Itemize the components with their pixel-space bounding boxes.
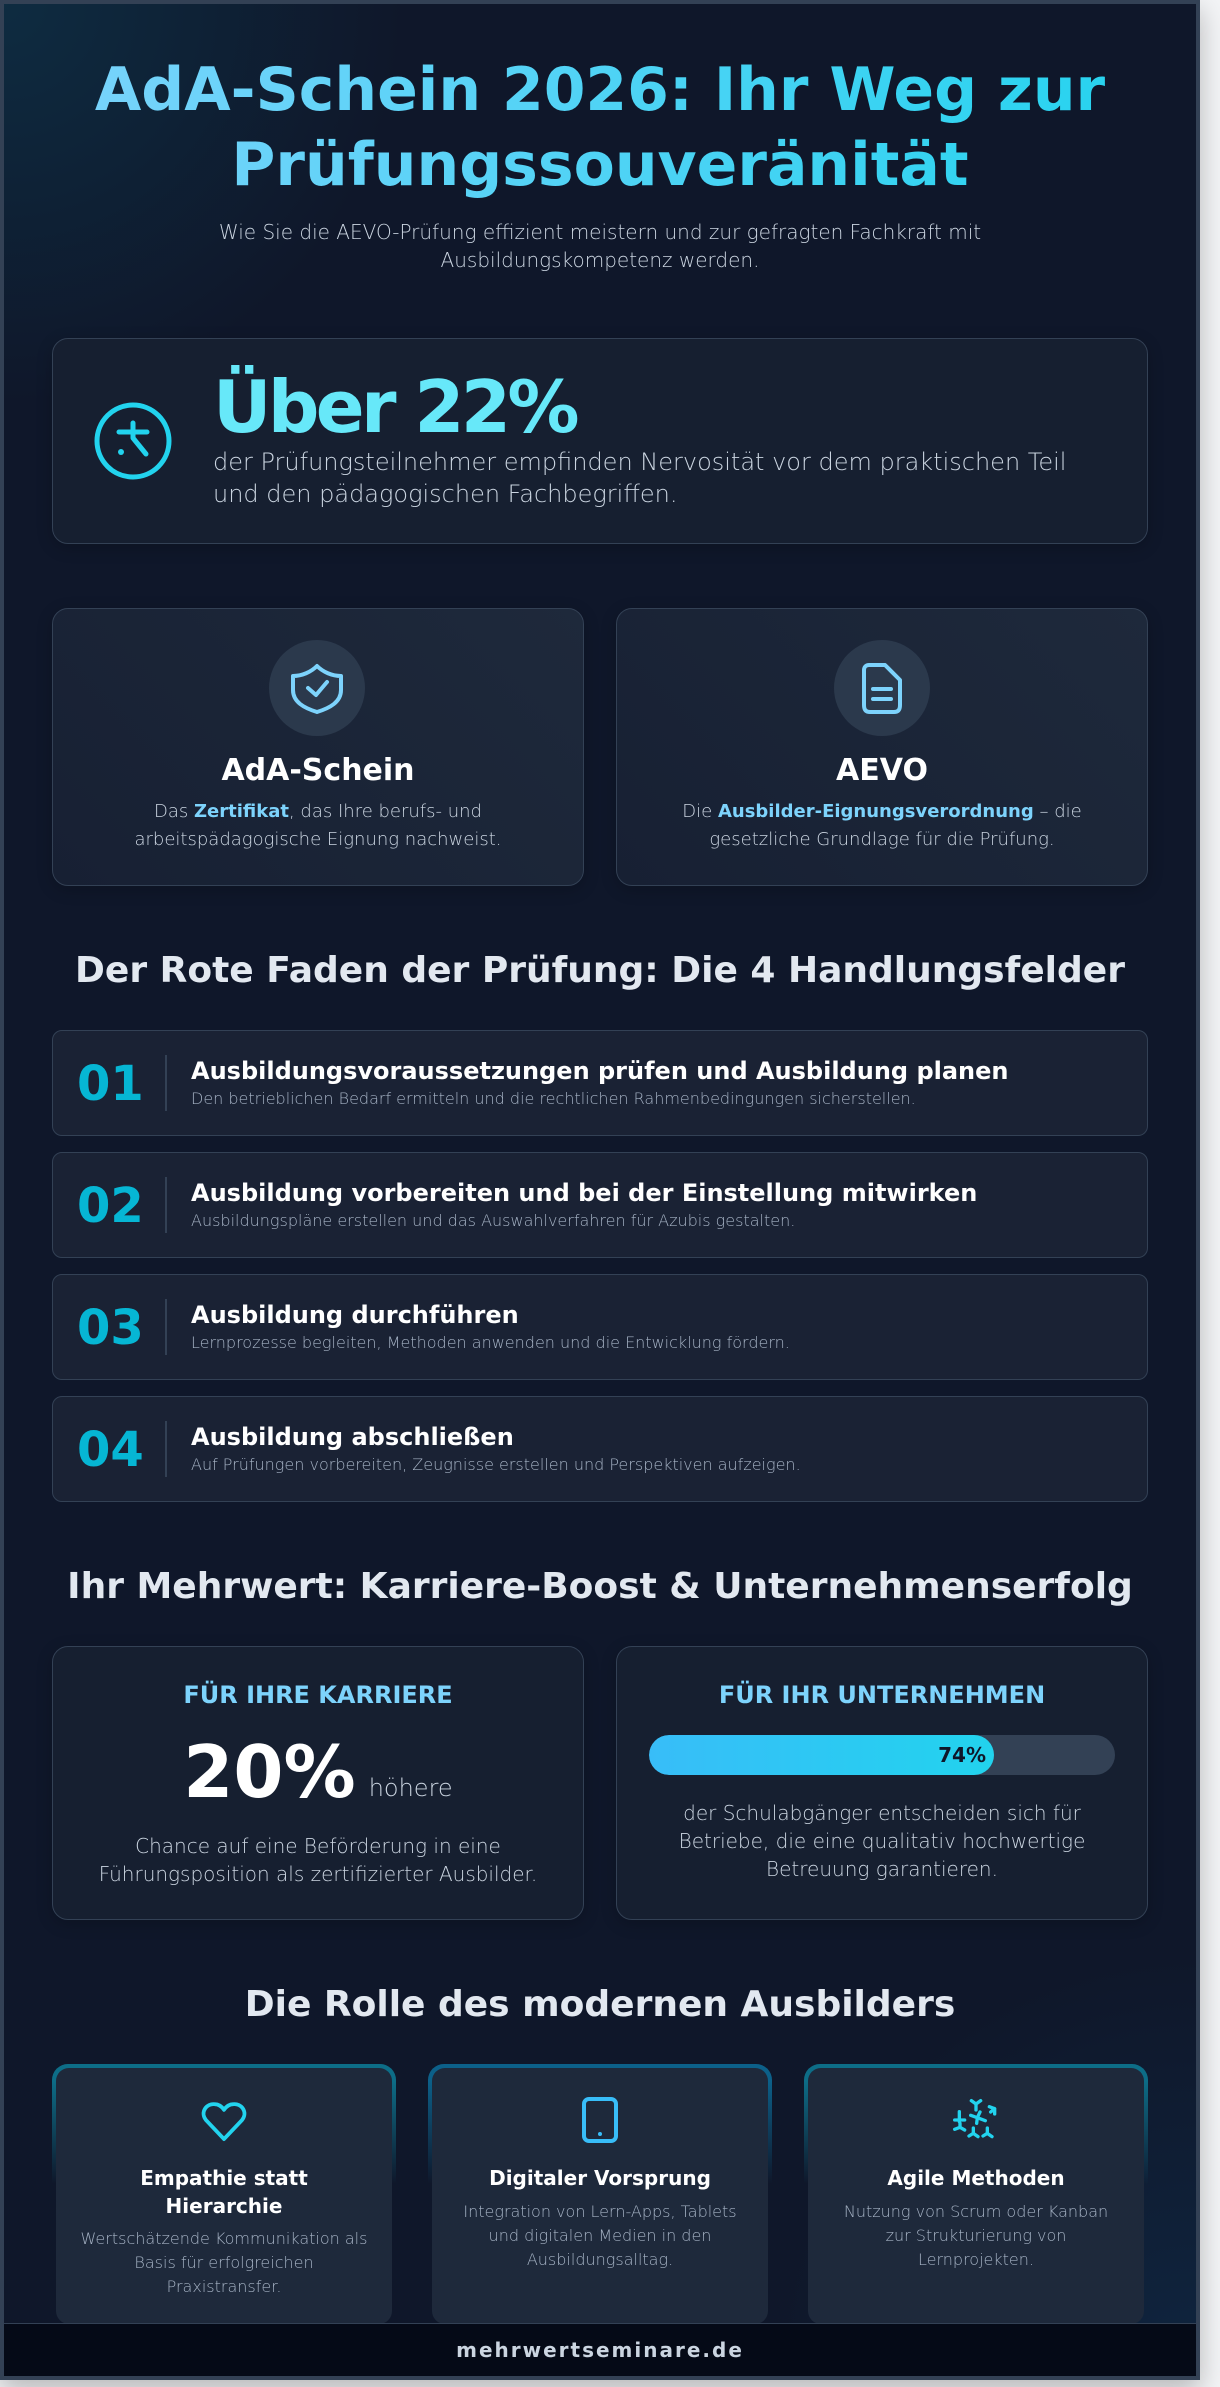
label: FÜR IHRE KARRIERE [183, 1681, 453, 1709]
heading: Rolle: Die Rolle des modernen Ausbilders [245, 1984, 955, 2025]
icon: document [834, 640, 930, 736]
role text: zur Strukturierung von [886, 2226, 1066, 2245]
icon: agile network [952, 2098, 996, 2138]
row 02: 02 [77, 1178, 144, 1234]
stat description: der Prüfungsteilnehmer empfinden Nervosität vor dem praktischen Teil [213, 448, 1066, 476]
title [4, 53, 1196, 203]
row 01: Den betrieblichen Bedarf ermitteln und die rechtlichen Rahmenbedingungen sicherstellen. [191, 1089, 916, 1108]
row 04 [52, 1396, 1148, 1502]
title: AdA-Schein 2026: Ihr Weg zur [95, 55, 1105, 125]
text: der Schulabgänger entscheiden sich für [683, 1801, 1081, 1825]
panel: Unternehmen [616, 1646, 1148, 1920]
row 04: Auf Prüfungen vorbereiten, Zeugnisse erstellen und Perspektiven aufzeigen. [191, 1455, 801, 1474]
row 04: 04 [77, 1422, 144, 1478]
row 03: Lernprozesse begleiten, Methoden anwenden und die Entwicklung fördern. [191, 1333, 790, 1352]
heading: Handlungsfelder: Der Rote Faden der Prüfung: Die 4 Handlungsfelder [75, 950, 1125, 991]
text: Führungsposition als zertifizierter Ausbilder. [99, 1862, 537, 1886]
icon: tablet [582, 2097, 618, 2143]
row 01 [52, 1030, 1148, 1136]
card text: arbeitspädagogische Eignung nachweist. [134, 829, 502, 850]
label: FÜR IHR UNTERNEHMEN [719, 1681, 1045, 1709]
card text [682, 801, 1082, 850]
text: Betreuung garantieren. [766, 1857, 998, 1881]
panel: statistic 22% [52, 338, 1148, 544]
subtitle [219, 220, 981, 272]
panel: Agile [804, 2064, 1148, 2324]
role text: Integration von Lern-Apps, Tablets [463, 2202, 737, 2221]
panel: Digital [428, 2064, 772, 2324]
row 03: 03 [77, 1300, 144, 1356]
role text: Nutzung von Scrum oder Kanban [844, 2202, 1108, 2221]
role text: und digitalen Medien in den [489, 2226, 711, 2245]
progress bar 74% [649, 1735, 1115, 1775]
panel: Empathie [52, 2064, 396, 2324]
stat 20% höhere: 20% höhere [183, 1730, 453, 1814]
text [99, 1834, 537, 1886]
row 03: Ausbildung durchführen [191, 1301, 519, 1329]
role text: Wertschätzende Kommunikation als [81, 2229, 367, 2248]
card text [134, 801, 502, 850]
icon: shield [269, 640, 365, 736]
progress bar 74%: 74% [938, 1743, 986, 1767]
card text: gesetzliche Grundlage für die Prüfung. [709, 829, 1055, 850]
card text: Die Ausbilder-Eignungsverordnung – die [682, 801, 1082, 822]
stat description: und den pädagogischen Fachbegriffen. [213, 480, 677, 508]
subtitle: Ausbildungskompetenz werden. [441, 248, 759, 272]
row 02: Ausbildungspläne erstellen und das Auswahlverfahren für Azubis gestalten. [191, 1211, 795, 1230]
panel: AEVO [616, 608, 1148, 886]
card heading: AEVO [836, 753, 928, 788]
role text: Praxistransfer. [167, 2277, 281, 2296]
role text: Lernprojekten. [918, 2250, 1034, 2269]
row 02 [52, 1152, 1148, 1258]
icon: clock [94, 402, 172, 480]
role text [844, 2202, 1108, 2269]
subtitle: Wie Sie die AEVO-Prüfung effizient meistern und zur gefragten Fachkraft mit [219, 220, 981, 244]
panel: Karriere [52, 1646, 584, 1920]
role heading: Agile Methoden [887, 2166, 1065, 2190]
icon: heart [202, 2102, 246, 2142]
row 01: Ausbildungsvoraussetzungen prüfen und Ausbildung planen [191, 1057, 1008, 1085]
title: Prüfungssouveränität [231, 130, 969, 200]
row 01: 01 [77, 1056, 144, 1112]
card text: Das Zertifikat, das Ihre berufs- und [154, 801, 482, 822]
role text [81, 2229, 367, 2296]
stat number: Über 22% [213, 365, 576, 449]
role text [463, 2202, 737, 2269]
text: Chance auf eine Beförderung in eine [135, 1834, 501, 1858]
row 03 [52, 1274, 1148, 1380]
panel: AdA-Schein [52, 608, 584, 886]
footer text: mehrwertseminare.de [456, 2338, 744, 2362]
footer [4, 2323, 1196, 2376]
role heading [140, 2166, 308, 2218]
text: Betriebe, die eine qualitativ hochwertige [679, 1829, 1085, 1853]
row 02: Ausbildung vorbereiten und bei der Einstellung mitwirken [191, 1179, 977, 1207]
role heading: Hierarchie [166, 2194, 282, 2218]
card heading: AdA-Schein [221, 753, 415, 788]
role heading: Digitaler Vorsprung [489, 2166, 711, 2190]
role heading: Empathie statt [140, 2166, 308, 2190]
role text: Ausbildungsalltag. [527, 2250, 673, 2269]
row 04: Ausbildung abschließen [191, 1423, 514, 1451]
role text: Basis für erfolgreichen [134, 2253, 314, 2272]
text [679, 1801, 1085, 1881]
stat description [213, 448, 1066, 508]
heading: Mehrwert: Ihr Mehrwert: Karriere-Boost & Unternehmenserfolg [67, 1566, 1133, 1607]
